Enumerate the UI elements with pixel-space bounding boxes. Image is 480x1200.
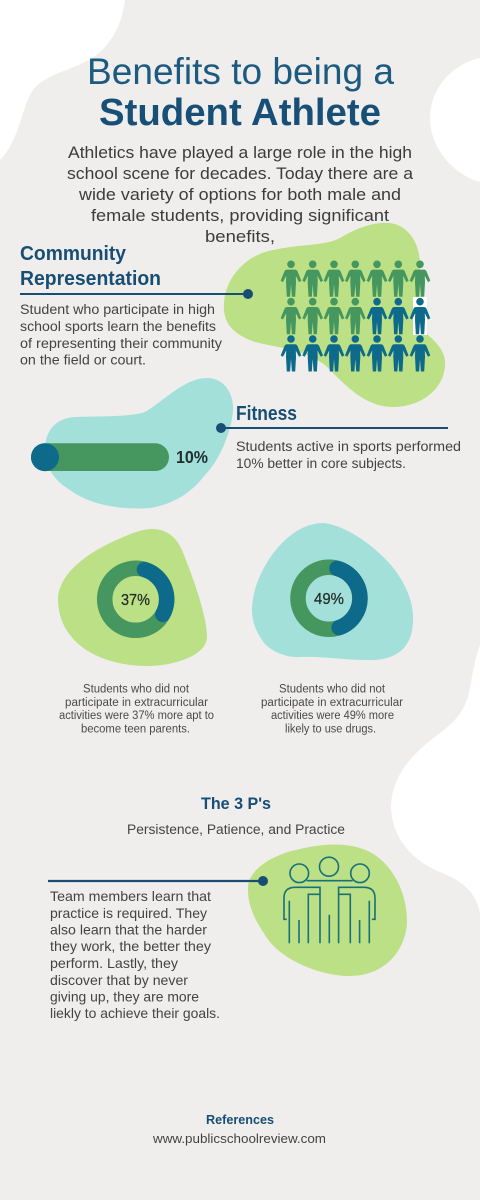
background blob: top left bbox=[0, 0, 125, 160]
body text: giving up, they are more bbox=[50, 988, 199, 1004]
teal blob bbox=[45, 378, 233, 508]
leader line bbox=[216, 423, 448, 433]
body text: discover that by never bbox=[50, 972, 188, 988]
body text: practice is required. They bbox=[50, 905, 207, 921]
intro text: female students, providing significant bbox=[91, 206, 389, 225]
subheading: Persistence, Patience, and Practice bbox=[127, 822, 345, 837]
body text bbox=[50, 888, 220, 1021]
intro text: Athletics have played a large role in the high bbox=[68, 143, 412, 162]
green blob bbox=[58, 529, 207, 666]
donut chart bbox=[105, 568, 167, 630]
background blob: lower right bbox=[391, 645, 480, 913]
body text: school sports learn the benefits bbox=[20, 319, 216, 334]
progress bar bbox=[31, 443, 169, 471]
references bbox=[152, 1113, 326, 1146]
body text: on the field or court. bbox=[20, 352, 146, 368]
people pictogram bbox=[281, 260, 430, 372]
body text: Student who participate in high bbox=[20, 302, 215, 317]
heading: Representation bbox=[20, 268, 161, 290]
caption: become teen parents. bbox=[81, 724, 190, 736]
title: Benefits to being a bbox=[87, 51, 394, 92]
teal blob bbox=[252, 523, 413, 660]
body text: perform. Lastly, they bbox=[50, 955, 178, 971]
caption: activities were 49% more bbox=[271, 710, 394, 722]
panel: community representation bbox=[20, 223, 445, 407]
panel: 49% statistic bbox=[252, 523, 413, 736]
intro text: wide variety of options for both male and bbox=[78, 185, 401, 204]
caption bbox=[59, 684, 214, 736]
intro text: school scene for decades. Today there are a bbox=[67, 164, 414, 183]
caption: participate in extracurricular bbox=[65, 697, 208, 709]
intro text: benefits, bbox=[205, 227, 275, 246]
caption: activities were 37% more apt to bbox=[59, 710, 214, 722]
title bbox=[87, 51, 394, 134]
body text: they work, the better they bbox=[50, 938, 211, 954]
leader line bbox=[20, 289, 253, 299]
title: Student Athlete bbox=[99, 92, 381, 134]
body text: of representing their community bbox=[20, 336, 222, 351]
body text: 10% better in core subjects. bbox=[236, 456, 406, 471]
intro text bbox=[67, 143, 414, 246]
leader line bbox=[48, 876, 268, 886]
heading bbox=[20, 243, 161, 290]
references: References bbox=[206, 1113, 274, 1127]
panel: the 3 P's bbox=[48, 794, 407, 1021]
heading: Fitness bbox=[236, 403, 297, 425]
value: 10%: 10% bbox=[176, 447, 208, 467]
background blob: upper right bbox=[430, 58, 480, 182]
panel: fitness bbox=[31, 378, 461, 508]
heading: Community bbox=[20, 243, 127, 265]
donut chart bbox=[298, 567, 360, 629]
caption: likely to use drugs. bbox=[285, 724, 376, 736]
body text: Students active in sports performed bbox=[236, 439, 461, 454]
body text: Team members learn that bbox=[50, 888, 211, 904]
caption bbox=[261, 684, 403, 736]
value: 37%: 37% bbox=[121, 592, 150, 609]
caption: Students who did not bbox=[279, 684, 386, 696]
caption: Students who did not bbox=[83, 684, 190, 696]
body text bbox=[20, 302, 222, 368]
panel: 37% statistic bbox=[58, 529, 214, 736]
body text bbox=[236, 439, 461, 471]
green blob bbox=[224, 223, 445, 407]
heading: The 3 P's bbox=[201, 794, 271, 813]
caption: participate in extracurricular bbox=[261, 697, 403, 709]
body text: liekly to achieve their goals. bbox=[50, 1005, 220, 1021]
body text: also learn that the harder bbox=[50, 922, 207, 938]
references: www.publicschoolreview.com bbox=[152, 1132, 326, 1146]
value: 49%: 49% bbox=[314, 591, 344, 608]
icon: team bbox=[284, 857, 375, 943]
green blob bbox=[248, 844, 407, 976]
